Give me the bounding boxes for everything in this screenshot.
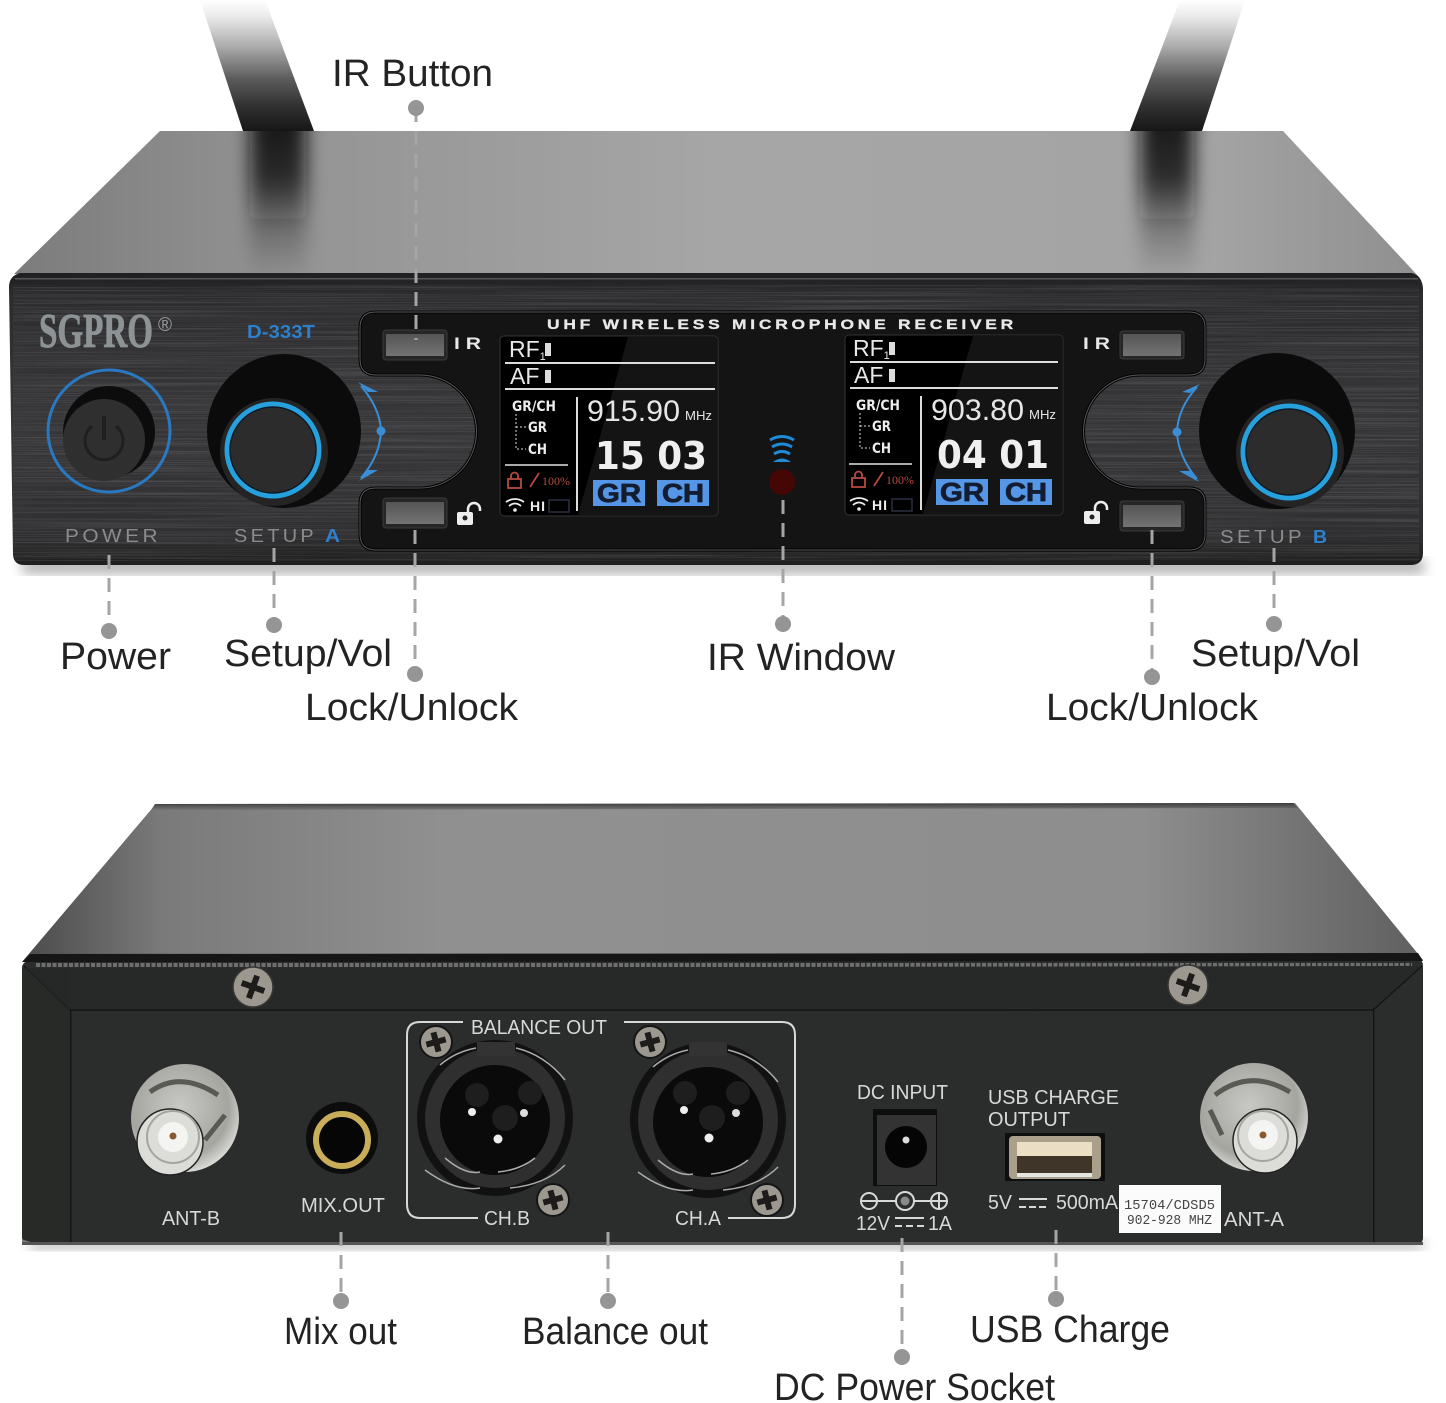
sticker: frequency: 902-928 MHZ: [1127, 1213, 1212, 1229]
IR button left: [383, 330, 481, 360]
text: USB rating: 5V: [988, 1192, 1013, 1214]
screen: channel A: MHz: [685, 408, 712, 423]
text: BALANCE OUT: BALANCE OUT: [471, 1017, 607, 1039]
connector: XLR CH.A: [630, 1042, 786, 1198]
callout: Balance out: Balance out: [522, 1311, 708, 1353]
label: SETUP A: A: [325, 526, 340, 546]
IR window icon: [769, 436, 795, 495]
connector: DC socket: [873, 1109, 937, 1186]
callout: USB Charge: USB Charge: [970, 1309, 1170, 1351]
text: DC rating: [856, 1213, 953, 1235]
text: CH.B: CH.B: [484, 1208, 530, 1230]
shadow under back unit: [30, 1238, 1423, 1250]
text: USB CHARGE OUTPUT: [988, 1087, 1119, 1131]
shadow under front unit: [22, 558, 1424, 574]
screen: channel B: GR/CH: [856, 398, 900, 414]
arrow: volume A: [358, 382, 386, 481]
knob: setup B: [1199, 353, 1355, 509]
screen: channel B: 100%: [886, 473, 914, 487]
rear plate: [22, 958, 1423, 1243]
front plate: [9, 273, 1423, 565]
callout: USB Charge: [970, 1230, 1170, 1351]
callout: Power: Power: [60, 636, 171, 678]
text: USB rating: 500mA: [1056, 1192, 1119, 1214]
panel title: UHF WIRELESS MICROPHONE RECEIVER: [547, 316, 1017, 332]
screen: channel A: CH: [528, 442, 547, 458]
arrow: volume B: [1172, 384, 1200, 482]
lock button right: [1084, 501, 1184, 531]
text: MIX.OUT: MIX.OUT: [301, 1195, 385, 1217]
screen: channel B: GR: [940, 477, 984, 507]
IR button right: [1083, 331, 1184, 359]
callout: IR Window: [707, 500, 896, 679]
callout: Balance out: [522, 1232, 708, 1353]
knob: setup A: [207, 354, 361, 508]
callout: Power: [60, 555, 171, 678]
screen: channel A: 1: [540, 351, 546, 363]
callout: IR Button: IR Button: [332, 53, 493, 95]
antenna: left: [200, 0, 314, 131]
IR button left: I R: [454, 334, 481, 353]
label: SETUP A: SETUP: [234, 526, 317, 546]
connector: XLR CH.B: [417, 1040, 573, 1196]
text: ANT-A: ANT-A: [1224, 1209, 1285, 1231]
callout: Setup/Vol A: Setup/Vol: [224, 633, 392, 675]
top surface: [14, 131, 1420, 278]
IR button right: I R: [1083, 334, 1110, 353]
text: USB CHARGE OUTPUT: USB CHARGE: [988, 1087, 1119, 1109]
text: CH.A: CH.A: [675, 1208, 722, 1230]
text: DC rating: 12V: [856, 1213, 891, 1235]
callout: Setup/Vol B: Setup/Vol: [1191, 633, 1360, 675]
screen: channel B: CH: [1005, 477, 1047, 507]
label: SETUP B: SETUP: [1220, 527, 1305, 547]
callout: Mix out: Mix out: [284, 1311, 397, 1353]
screen: channel A: 100%: [542, 474, 570, 488]
connector: USB port: [1005, 1133, 1105, 1181]
screen: channel B: 04 01: [937, 433, 1049, 477]
connector: ANT-A: [1200, 1063, 1308, 1173]
logo: SGPRO: ®: [158, 315, 172, 336]
screen: channel B: RF: [853, 335, 884, 361]
screen: channel A: HI: [530, 498, 545, 514]
antenna: right: [1130, 0, 1245, 131]
screen: channel A: 915.90: [587, 395, 680, 428]
text: USB rating: [988, 1192, 1119, 1214]
connector: mix out jack: [306, 1102, 378, 1174]
connector: ANT-B: [131, 1064, 239, 1175]
screen: channel B: MHz: [1029, 407, 1056, 422]
screws: XLR: [420, 1026, 783, 1216]
callout: Mix out: [284, 1232, 397, 1353]
screen: channel A: CH: [662, 478, 704, 508]
screw: rear top right: [1168, 965, 1208, 1005]
text: ANT-B: ANT-B: [162, 1208, 220, 1230]
screw: rear top left: [233, 967, 273, 1007]
screen: channel A: RF: [509, 336, 540, 362]
screen: channel A: [500, 336, 718, 516]
DC polarity symbol: [861, 1192, 947, 1210]
callout: Setup/Vol A: [224, 548, 392, 675]
text: USB CHARGE OUTPUT: OUTPUT: [988, 1109, 1070, 1131]
screen: channel A: AF: [510, 363, 539, 389]
screen: channel B: CH: [872, 441, 891, 457]
callout: Lock/Unlock B: Lock/Unlock: [1046, 687, 1259, 729]
text: DC INPUT: DC INPUT: [857, 1082, 948, 1104]
screen: channel B: [845, 335, 1063, 515]
text: DC rating: 1A: [928, 1213, 953, 1235]
power button: [48, 370, 170, 492]
model number: D-333T: [247, 322, 315, 342]
sticker: frequency: 15704/CDSD5: [1124, 1198, 1215, 1214]
callout: IR Window: IR Window: [707, 637, 896, 679]
callout: Setup/Vol B: [1191, 548, 1360, 675]
screen: channel B: GR: [872, 419, 891, 435]
back view: receiver: [22, 803, 1423, 1250]
screen: channel B: 1: [884, 350, 890, 362]
screen: channel B: 903.80: [931, 394, 1024, 427]
callout: Lock/Unlock A: Lock/Unlock: [305, 687, 519, 729]
balance out group: [407, 1017, 795, 1230]
front view: receiver: [9, 110, 1424, 574]
callout: DC Power Socket: [774, 1238, 1055, 1403]
sticker: frequency: [1119, 1185, 1221, 1233]
callout: IR Button: [332, 53, 493, 340]
frame: [407, 1022, 795, 1218]
screen: channel B: AF: [854, 362, 883, 388]
label: SETUP B: B: [1313, 527, 1327, 547]
label: POWER: POWER: [65, 526, 161, 546]
logo: SGPRO: SGPRO: [39, 303, 153, 358]
screen: channel A: GR/CH: [512, 399, 556, 415]
screen: channel A: 15 03: [595, 434, 707, 478]
callout: Lock/Unlock A: [305, 530, 519, 729]
screen: channel B: HI: [872, 497, 887, 513]
lock button left: [383, 498, 480, 528]
top surface: [22, 803, 1423, 962]
callout: Lock/Unlock B: [1046, 530, 1259, 729]
screen: channel A: GR: [528, 420, 547, 436]
screen: channel A: GR: [597, 478, 641, 508]
control panel: [360, 312, 1205, 550]
